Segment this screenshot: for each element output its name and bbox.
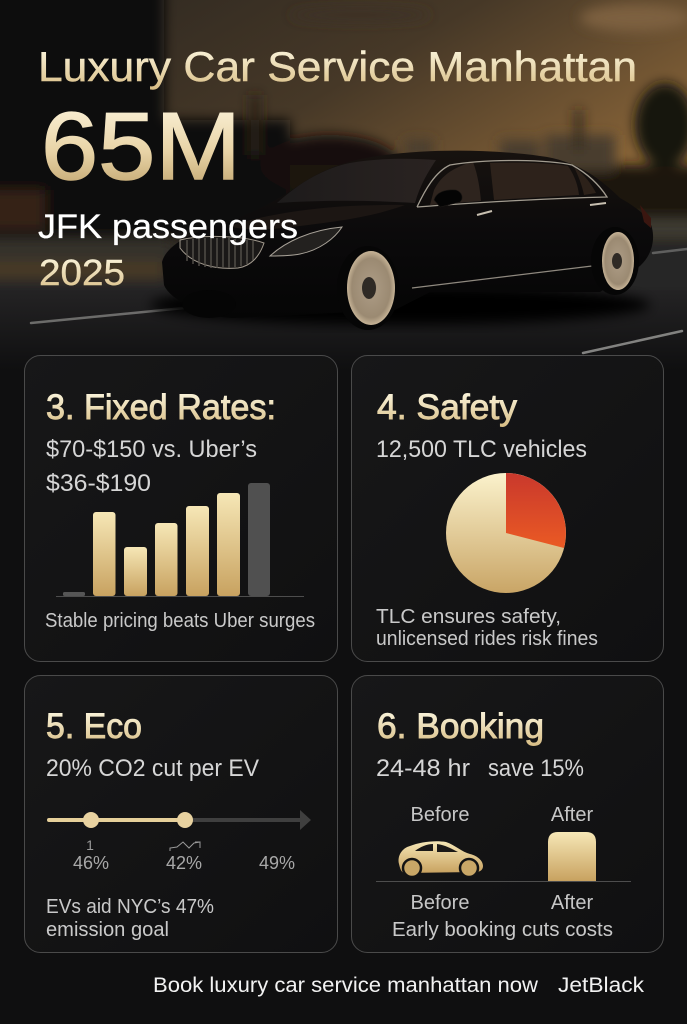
- side window middle: [490, 163, 579, 200]
- side window front: [430, 162, 481, 205]
- text: booking savings: [376, 755, 584, 782]
- road markings: [31, 249, 687, 353]
- stat label: JFK passengers: JFK passengers: [38, 208, 298, 246]
- window chrome trim: [417, 160, 607, 207]
- rear wheel: [591, 227, 639, 295]
- before/after chart: [376, 804, 631, 914]
- panel: fixed rates: [24, 356, 338, 662]
- caption: fixed rates: Stable pricing beats Uber surges: [45, 610, 315, 632]
- tail light: [640, 205, 651, 228]
- text: vehicle count: 12,500 TLC vehicles: [376, 436, 587, 463]
- caption: eco: emission goal: [46, 919, 169, 941]
- caption: safety: [376, 606, 598, 650]
- heading: fixed rates: 3. Fixed Rates:: [46, 388, 276, 427]
- footer brand: JetBlack: [558, 974, 645, 997]
- timeline: emission milestones: 42%: [166, 853, 202, 873]
- limousine photo illustration: [150, 151, 653, 330]
- text: price comparison: $70-$150 vs. Uber’s: [46, 436, 257, 463]
- caption: eco: [46, 896, 214, 941]
- text: booking savings: 24-48 hr: [376, 755, 470, 782]
- pie chart: licensed share: [446, 473, 566, 593]
- icon: car: [399, 841, 483, 877]
- text: price comparison: [46, 436, 257, 497]
- car body: [162, 151, 653, 318]
- bar chart: prices: [56, 483, 304, 596]
- hood highlight: [228, 205, 405, 229]
- car shadow: [150, 285, 650, 325]
- big stat: 65M: 65M: [41, 93, 241, 200]
- door handles: [477, 203, 606, 215]
- timeline: emission milestones: 1: [86, 837, 94, 853]
- timeline: emission milestones: 46%: [73, 853, 109, 873]
- before/after chart: After: [551, 892, 593, 914]
- front left tyre: [182, 290, 236, 318]
- caption: eco: EVs aid NYC’s 47%: [46, 896, 214, 918]
- timeline: emission milestones: 49%: [259, 853, 295, 873]
- mirror: [434, 190, 462, 207]
- windshield: [277, 159, 436, 203]
- caption: safety: TLC ensures safety,: [376, 606, 561, 628]
- icon: trend line: [170, 842, 200, 851]
- caption: safety: unlicensed rides risk fines: [376, 628, 598, 650]
- before/after chart: Before: [411, 892, 469, 914]
- footer call to action: Book luxury car service manhattan now: [153, 974, 539, 997]
- stat year: 2025: 2025: [39, 252, 125, 293]
- heading: safety: 4. Safety: [377, 388, 518, 427]
- caption: booking: Early booking cuts costs: [392, 919, 613, 941]
- heading: booking: 6. Booking: [377, 707, 544, 746]
- grille: [180, 236, 264, 268]
- side window rear: [574, 167, 596, 195]
- timeline: emission milestones: [49, 810, 311, 873]
- heading: eco: 5. Eco: [46, 707, 142, 746]
- front wheel: [337, 246, 399, 330]
- hero photo background: dusk skyline: [0, 0, 687, 370]
- title: Luxury Car Service Manhattan: [38, 43, 637, 90]
- lower chrome line: [412, 266, 592, 288]
- text: price comparison: $36-$190: [46, 470, 151, 497]
- text: CO2 cut: 20% CO2 cut per EV: [46, 755, 259, 782]
- headlight: [270, 227, 342, 256]
- panel: eco: [24, 676, 338, 952]
- panel: booking: [352, 676, 664, 952]
- text: booking savings: save 15%: [488, 755, 584, 782]
- before/after chart: Before: [411, 804, 469, 826]
- panel: safety: [352, 356, 664, 662]
- before/after chart: After: [551, 804, 593, 826]
